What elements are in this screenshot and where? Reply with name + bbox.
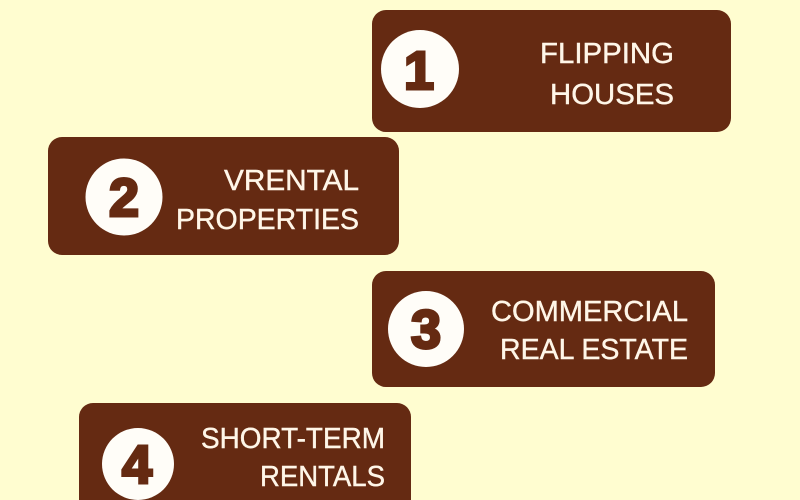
icon: number 3 badge: 3 xyxy=(411,300,441,360)
icon: number 4 badge: 4 xyxy=(122,435,152,495)
label: vrental properties xyxy=(176,165,359,236)
icon: number 1 badge: 1 xyxy=(404,41,434,101)
label: flipping houses: HOUSES xyxy=(550,79,674,111)
panel: step 4 short-term rentals xyxy=(79,403,411,500)
label: vrental properties: VRENTAL xyxy=(224,165,359,197)
label: flipping houses xyxy=(540,38,674,111)
icon: number 1 badge xyxy=(381,30,459,108)
label: commercial real estate: REAL ESTATE xyxy=(500,334,688,366)
label: commercial real estate: COMMERCIAL xyxy=(491,296,688,328)
label: short-term rentals: SHORT-TERM xyxy=(201,423,385,455)
panel: step 2 vrental properties xyxy=(48,137,399,255)
icon: number 4 badge xyxy=(102,428,174,500)
icon: number 2 badge xyxy=(86,158,162,236)
label: short-term rentals: RENTALS xyxy=(260,461,385,493)
label: short-term rentals xyxy=(201,423,385,493)
panel: step 3 commercial real estate xyxy=(372,271,715,387)
icon: number 3 badge xyxy=(388,291,464,367)
label: commercial real estate xyxy=(491,296,688,366)
icon: number 2 badge: 2 xyxy=(109,168,139,228)
panel: step 1 flipping houses xyxy=(372,10,731,132)
label: flipping houses: FLIPPING xyxy=(540,38,674,70)
label: vrental properties: PROPERTIES xyxy=(176,204,359,236)
